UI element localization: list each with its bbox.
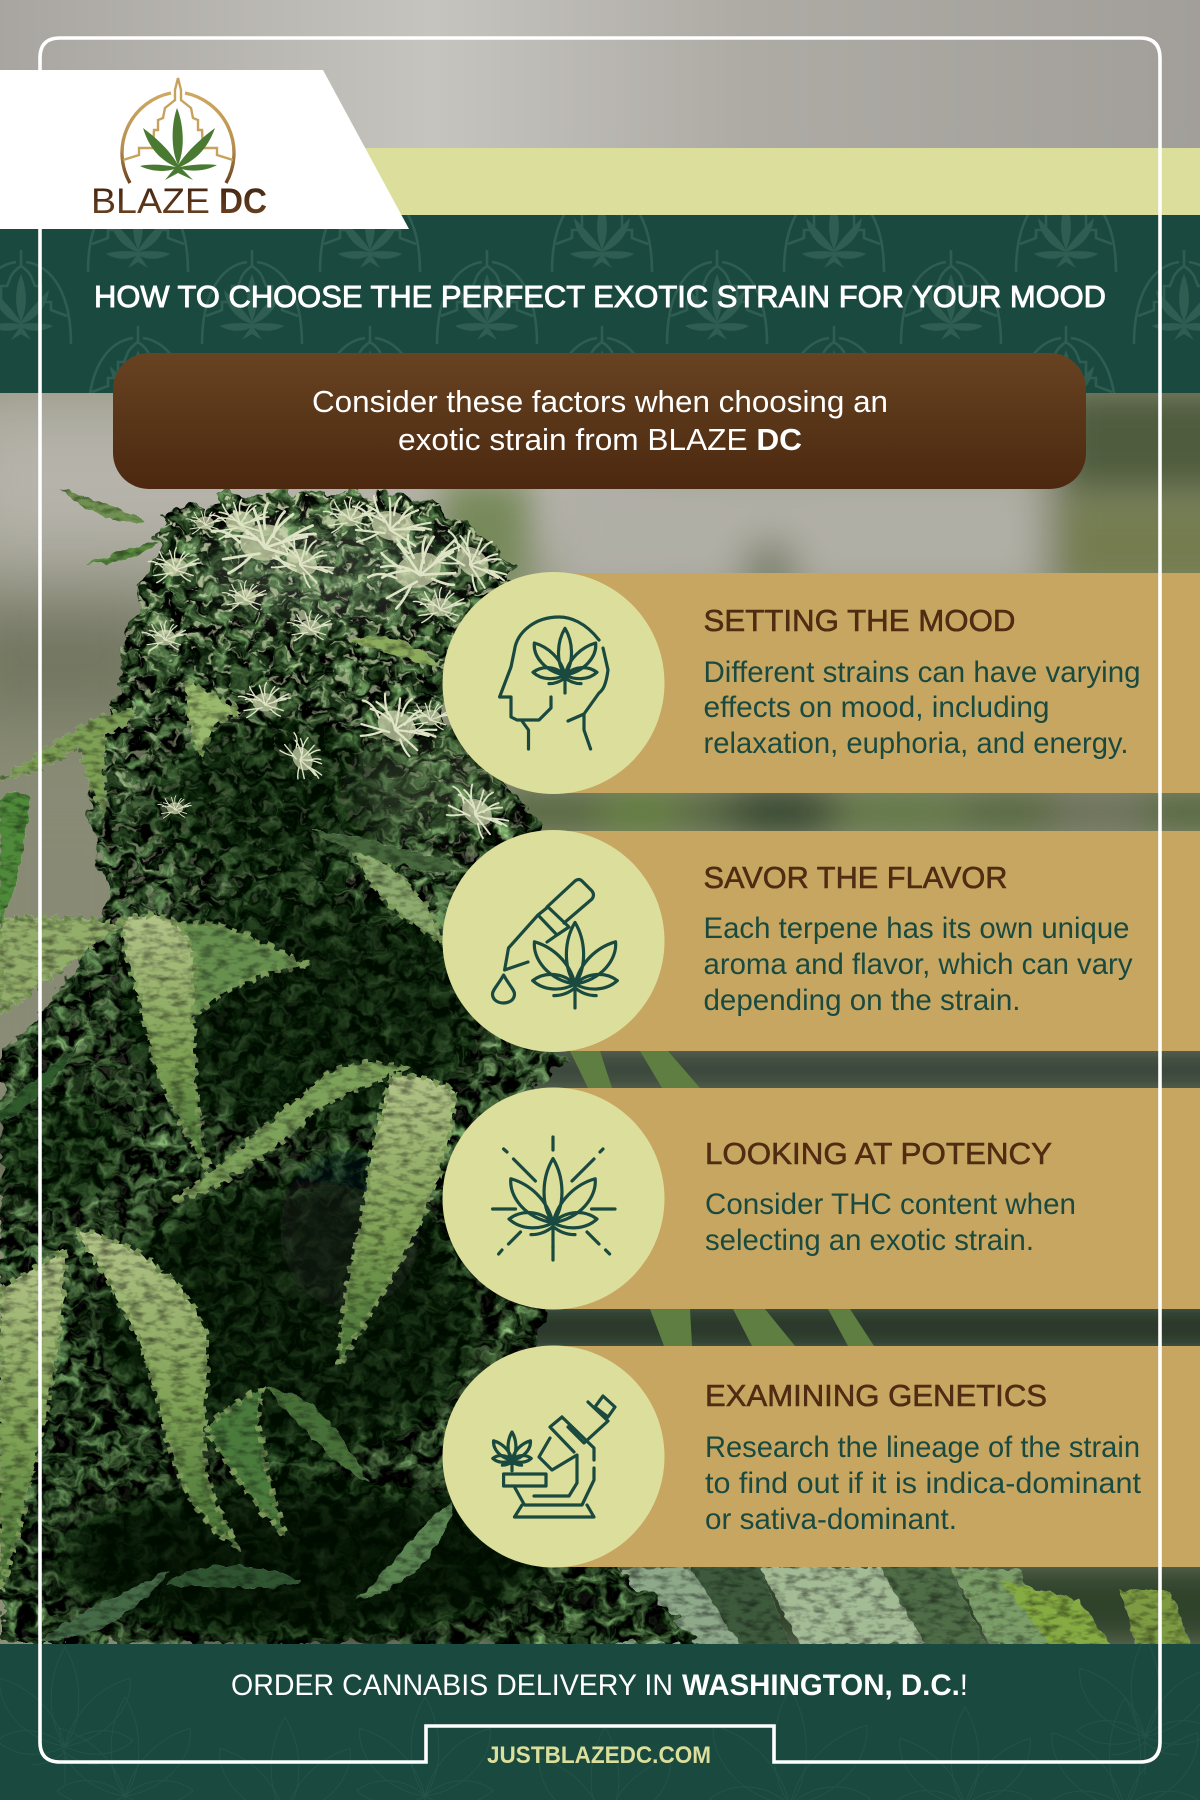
- body text: [704, 656, 1140, 760]
- body text: depending on the strain.: [704, 984, 1020, 1017]
- body text: effects on mood, including: [704, 691, 1050, 724]
- factor 4: examining genetics: [442, 1346, 1141, 1568]
- factor 2: savor the flavor: [442, 830, 1133, 1052]
- stems between the bars: [570, 1051, 874, 1346]
- footer call to action: [231, 1669, 968, 1702]
- panel: factor 4 bar: [553, 1346, 1200, 1567]
- lower foliage: [560, 1567, 1190, 1644]
- plant shading: [0, 520, 550, 1640]
- white buds: [142, 485, 518, 847]
- footer url: JUSTBLAZEDC.COM: [487, 1742, 711, 1769]
- photo: cannabis plant: [0, 480, 720, 1650]
- footer band: [0, 1637, 1200, 1800]
- body text: aroma and flavor, which can vary: [704, 948, 1133, 981]
- body text: relaxation, euphoria, and energy.: [704, 727, 1128, 760]
- factor 1: setting the mood: [442, 572, 1140, 794]
- icon: dropper over leaf: [442, 830, 664, 1052]
- heading: SETTING THE MOOD: [704, 603, 1016, 638]
- title: HOW TO CHOOSE THE PERFECT EXOTIC STRAIN FOR YOUR MOOD: [94, 279, 1106, 314]
- intro text: Consider these factors when choosing an: [312, 384, 888, 419]
- heading: SAVOR THE FLAVOR: [704, 860, 1008, 895]
- lime band: [0, 148, 1200, 215]
- header band with leaf pattern: [0, 215, 1200, 393]
- factor 3: looking at potency: [442, 1088, 1076, 1310]
- intro text: exotic strain from BLAZE DC: [398, 422, 802, 457]
- logo: BLAZE DC emblem: [91, 78, 267, 221]
- icon: glowing leaf: [442, 1088, 664, 1310]
- heading: LOOKING AT POTENCY: [705, 1136, 1052, 1171]
- icon: microscope with leaf: [442, 1346, 664, 1568]
- panel: factor 2 bar: [553, 831, 1200, 1051]
- intro text: [312, 384, 888, 457]
- body text: Each terpene has its own unique: [704, 912, 1130, 945]
- body text: to find out if it is indica-dominant: [705, 1467, 1141, 1500]
- body text: selecting an exotic strain.: [705, 1224, 1034, 1257]
- logo: BLAZE DC emblem: DC: [219, 182, 267, 221]
- body text: [705, 1431, 1141, 1536]
- footer call to action: ORDER CANNABIS DELIVERY IN: [231, 1669, 673, 1702]
- logo: BLAZE DC emblem: BLAZE: [91, 182, 210, 221]
- body text: [704, 912, 1133, 1017]
- panel: intro callout: [113, 353, 1086, 489]
- body text: Different strains can have varying: [704, 656, 1140, 689]
- body text: Consider THC content when: [705, 1188, 1076, 1221]
- footer call to action: WASHINGTON, D.C.!: [682, 1669, 968, 1702]
- logo panel: [0, 70, 409, 229]
- panel: factor 3 bar: [553, 1088, 1200, 1309]
- heading: EXAMINING GENETICS: [705, 1378, 1047, 1413]
- panel: factor 1 bar: [553, 573, 1200, 793]
- body text: or sativa-dominant.: [705, 1503, 957, 1536]
- icon: head with leaf: [442, 572, 664, 794]
- serrated fan leaves: [0, 487, 470, 1640]
- body text: [705, 1188, 1076, 1257]
- body text: Research the lineage of the strain: [705, 1431, 1140, 1464]
